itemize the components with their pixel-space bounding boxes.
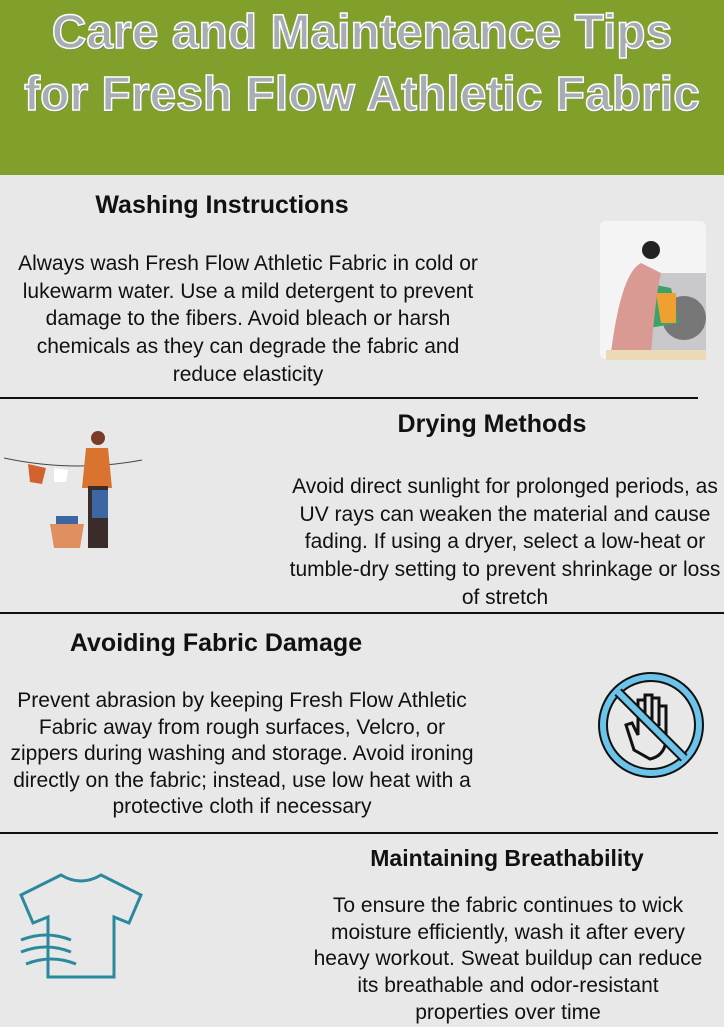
heading: washing: Washing Instructions xyxy=(95,191,349,219)
text: breathability: heavy workout. Sweat buildup can reduce xyxy=(314,947,702,970)
text: drying: fading. If using a dryer, select a low-heat or xyxy=(305,530,705,553)
header banner xyxy=(0,0,724,175)
text: drying: Avoid direct sunlight for prolonged periods, as xyxy=(292,475,718,498)
heading: drying: Drying Methods xyxy=(398,410,586,438)
text: drying: of stretch xyxy=(462,586,548,609)
icon: clothesline xyxy=(4,431,142,548)
text: washing: lukewarm water. Use a mild detergent to prevent xyxy=(23,280,473,303)
title xyxy=(24,6,700,121)
text: avoiding damage: protective cloth if necessary xyxy=(112,795,372,818)
text: avoiding damage xyxy=(10,689,474,818)
text: washing xyxy=(18,252,478,386)
heading: avoiding damage: Avoiding Fabric Damage xyxy=(70,629,362,657)
text: washing: damage to the fibers. Avoid bleach or harsh xyxy=(46,307,450,330)
icon: t-shirt xyxy=(19,873,143,978)
title: for Fresh Flow Athletic Fabric xyxy=(24,68,700,121)
text: avoiding damage: Fabric away from rough surfaces, Velcro, or xyxy=(39,716,445,738)
text: avoiding damage: zippers during washing and storage. Avoid ironing xyxy=(10,742,474,765)
title: Care and Maintenance Tips xyxy=(52,6,672,59)
text: washing: chemicals as they can degrade the fabric and xyxy=(37,335,459,358)
text: drying: tumble-dry setting to prevent shrinkage or loss xyxy=(290,558,720,581)
text: breathability: moisture efficiently, wash it after every xyxy=(331,921,685,944)
text: washing: reduce elasticity xyxy=(173,363,323,386)
heading: breathability: Maintaining Breathability xyxy=(370,845,644,871)
text: washing: Always wash Fresh Flow Athletic Fabric in cold or xyxy=(18,252,478,275)
icon: washing machine xyxy=(600,221,706,360)
text: breathability xyxy=(314,894,702,1024)
text: breathability: properties over time xyxy=(415,1001,601,1024)
text: drying: UV rays can weaken the material and cause xyxy=(300,503,710,526)
icon: no hand xyxy=(598,672,704,778)
text: avoiding damage: directly on the fabric; instead, use low heat with a xyxy=(13,768,471,792)
text: avoiding damage: Prevent abrasion by keeping Fresh Flow Athletic xyxy=(17,689,467,712)
text: breathability: To ensure the fabric continues to wick xyxy=(333,894,683,917)
text: drying xyxy=(290,475,720,609)
text: breathability: its breathable and odor-resistant xyxy=(357,974,659,997)
